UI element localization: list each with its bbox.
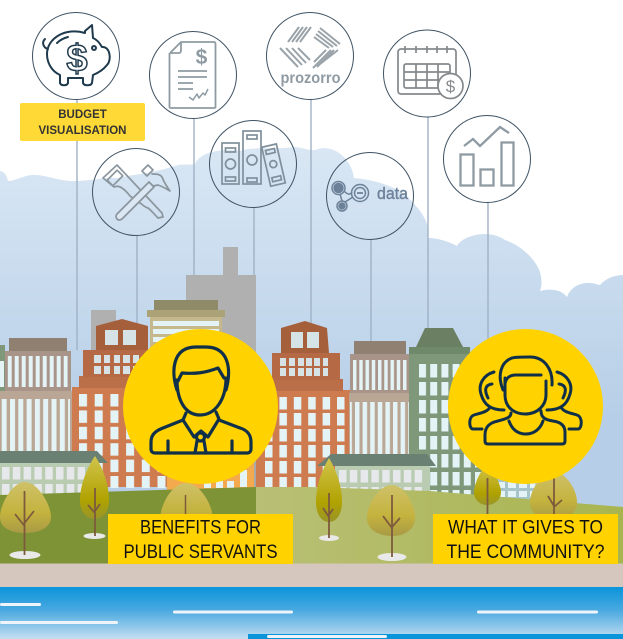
icon circle: piggy bank: $ <box>66 38 88 80</box>
yellow circle: public servant <box>123 329 278 484</box>
label: benefits for public servants: PUBLIC SERVANTS <box>124 542 278 563</box>
water <box>0 587 623 639</box>
green tower <box>409 328 489 500</box>
icon circle: prozorro logo: prozorro <box>280 70 340 87</box>
icon: public servant <box>151 347 251 453</box>
icon circle: signed financial document: $ <box>196 46 208 69</box>
icon circle: e-data logo: data <box>377 184 409 203</box>
icon circle: growth chart <box>444 116 530 202</box>
low blue-green building right <box>490 478 535 506</box>
icon: community group <box>470 357 581 444</box>
tree 6 <box>474 465 501 514</box>
middle orange building <box>256 321 350 489</box>
tree 2 <box>80 456 109 539</box>
icon connector lines <box>77 99 488 350</box>
low building middle <box>317 454 436 494</box>
icon circle: saw and hammer <box>92 148 180 236</box>
icon circle: piggy bank <box>32 12 120 100</box>
tree 4 <box>316 458 342 541</box>
icon circle: e-data logo <box>326 152 414 240</box>
icon circle: budget calendar <box>384 30 470 117</box>
label: what it gives to the community <box>433 514 618 564</box>
label: what it gives to the community: WHAT IT GIVES TO <box>448 518 603 538</box>
city buildings <box>0 247 535 506</box>
icon circle: signed financial document <box>150 32 236 118</box>
label: benefits for public servants <box>108 514 293 564</box>
beige tower <box>147 300 225 367</box>
tree 5 <box>367 485 415 561</box>
narrow amber building <box>167 440 257 490</box>
label: benefits for public servants: BENEFITS FOR <box>140 518 261 538</box>
left gray-brown building <box>0 338 72 461</box>
background sky clouds <box>0 147 623 600</box>
green ground <box>0 487 623 564</box>
icon circle: budget calendar: $ <box>446 77 456 96</box>
small green building left <box>0 345 5 395</box>
left orange building <box>72 319 172 488</box>
label: what it gives to the community: THE COMMUNITY? <box>446 542 604 563</box>
low building left <box>0 451 108 499</box>
yellow circle: community <box>448 329 603 484</box>
tree 3 <box>160 483 213 530</box>
label: budget visualisation <box>20 103 145 141</box>
right gray-brown building <box>349 341 417 463</box>
label: budget visualisation: BUDGET <box>58 109 107 121</box>
tree 7 <box>530 472 577 520</box>
gray background towers <box>91 247 256 395</box>
icon circle: binders <box>210 120 296 208</box>
label: budget visualisation: VISUALISATION <box>39 125 126 137</box>
trees <box>0 456 577 561</box>
icon circle: prozorro logo <box>266 12 354 100</box>
tree 1 <box>0 482 51 559</box>
promenade <box>0 564 623 587</box>
